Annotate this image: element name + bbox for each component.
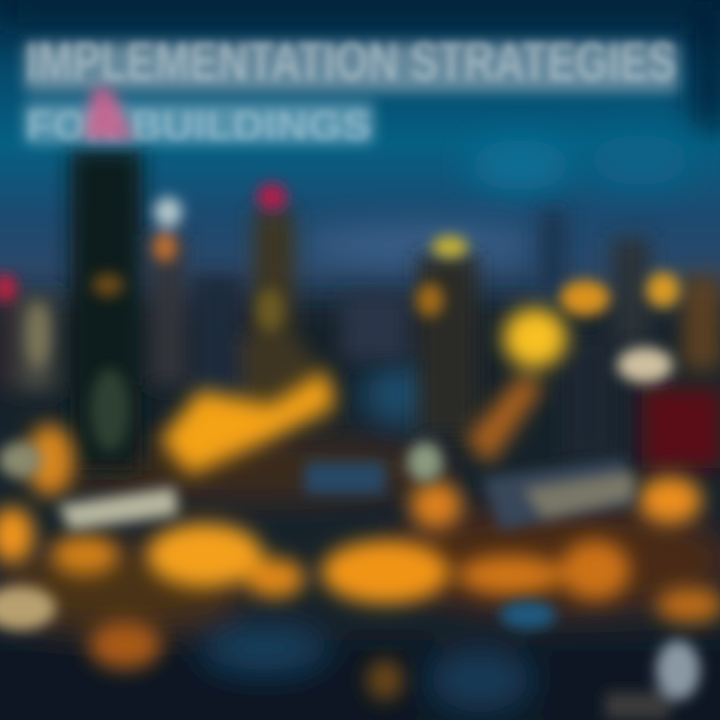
- orange glow lights: [0, 308, 720, 700]
- building: right tower: [612, 238, 650, 343]
- lower city dark mass: [0, 300, 720, 720]
- buildings: [0, 150, 720, 470]
- building: second tower: [152, 235, 184, 385]
- building: distant spire: [540, 210, 566, 295]
- title background: line two: [24, 102, 374, 144]
- building: tall left tower: [70, 150, 142, 470]
- building: central tower: [234, 210, 334, 425]
- title: line two: FOR BUILDINGS: [26, 104, 371, 148]
- pink spire over the title: [84, 88, 134, 140]
- building: center right tower: [418, 255, 478, 435]
- pale and dark rooftops: [0, 442, 700, 720]
- sky glow: [0, 0, 720, 265]
- building: left edge: [20, 295, 54, 390]
- title band: [24, 30, 679, 148]
- title background: line one: [24, 42, 679, 92]
- building: red block right: [642, 388, 720, 468]
- tower tops and lights: [0, 183, 680, 452]
- building: brown mid: [192, 275, 242, 400]
- building: mid right dark: [562, 335, 617, 460]
